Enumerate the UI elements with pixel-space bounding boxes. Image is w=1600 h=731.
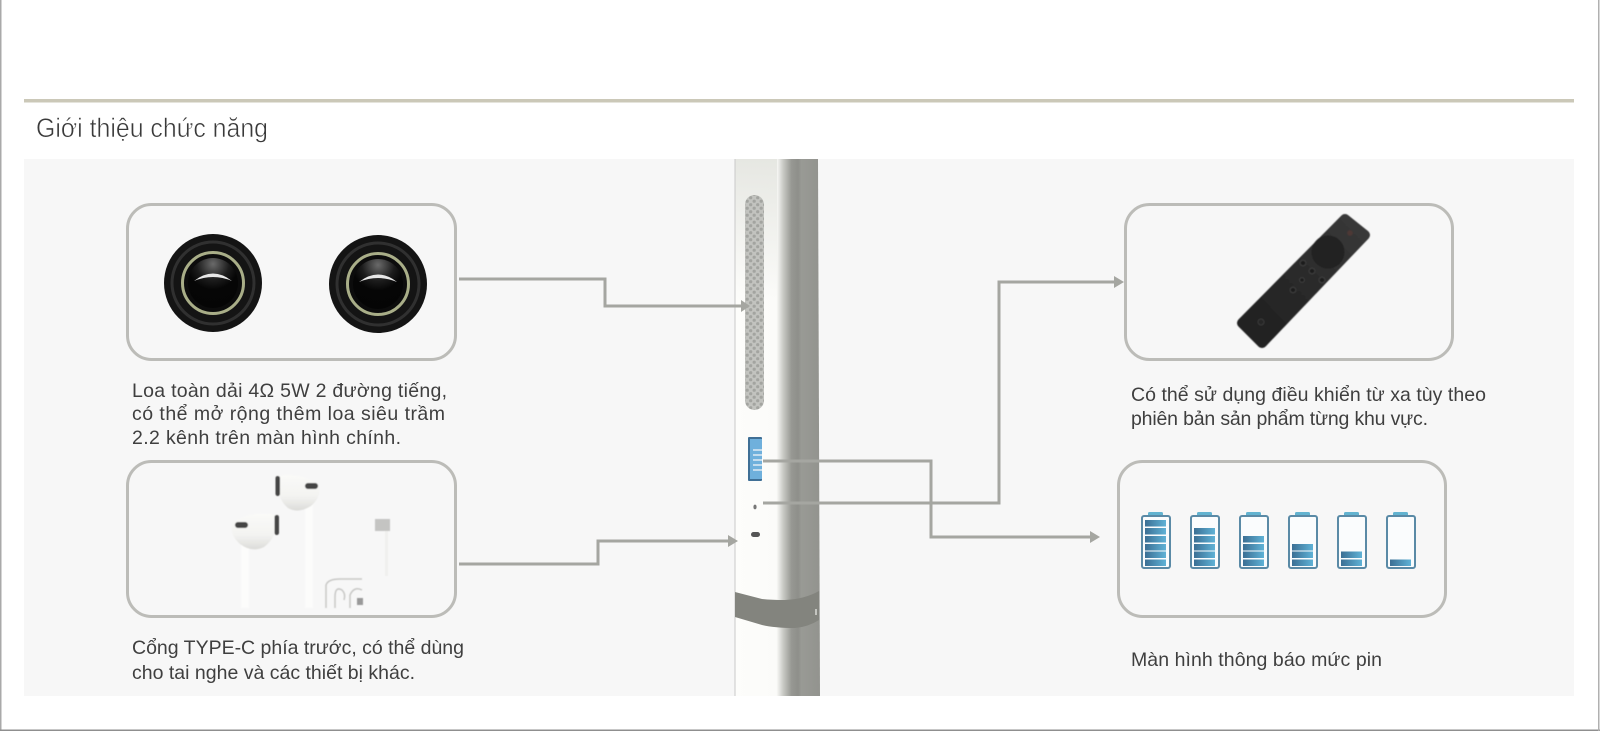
speaker description: có thể mở rộng thêm loa siêu trầm	[132, 403, 445, 425]
arrow: speakers to grille	[459, 279, 750, 312]
arrow: indicator to remote panel	[763, 276, 1124, 503]
icon: left speaker	[164, 234, 262, 332]
panel: speakers	[128, 204, 456, 360]
remote description: phiên bản sản phẩm từng khu vực.	[1131, 408, 1428, 430]
indicator hole	[753, 505, 757, 509]
grey band	[735, 591, 819, 628]
product pole	[734, 159, 820, 696]
speaker grille	[745, 195, 764, 410]
icon: right speaker	[329, 235, 427, 333]
speaker description: 2.2 kênh trên màn hình chính.	[132, 427, 401, 449]
earphone description: Cổng TYPE-C phía trước, có thể dùng	[132, 637, 464, 659]
arrow: earphones to Type-C port	[459, 535, 738, 564]
speaker description: Loa toàn dải 4Ω 5W 2 đường tiếng,	[132, 380, 447, 402]
USB port	[748, 437, 762, 481]
arrow: USB port to battery panel	[763, 461, 1100, 543]
mini earphone picture	[326, 579, 362, 608]
Type-C port	[751, 532, 760, 537]
icon: battery 3 bars	[1289, 512, 1317, 568]
icon: battery 2 bars	[1338, 512, 1366, 568]
panel: earphones	[128, 462, 456, 616]
remote description	[1131, 384, 1486, 430]
icon: battery 6 bars	[1142, 512, 1170, 568]
icon: remote	[1242, 219, 1365, 343]
earphone description	[132, 637, 464, 684]
icon: battery 5 bars	[1191, 512, 1219, 568]
icon: battery 1 bar	[1387, 512, 1415, 568]
icon: battery 4 bars	[1240, 512, 1268, 568]
remote description: Có thể sử dụng điều khiển từ xa tùy theo	[1131, 384, 1486, 406]
panel: background	[24, 159, 1574, 696]
battery description: Màn hình thông báo mức pin	[1131, 649, 1382, 671]
panel: battery indicator	[1118, 462, 1446, 616]
title: Giới thiệu chức năng	[36, 113, 268, 143]
panel: remote control	[1126, 204, 1452, 360]
connector	[375, 519, 390, 531]
speaker description	[132, 380, 447, 449]
heading rule	[24, 99, 1574, 102]
icon: earphones	[232, 475, 390, 608]
earphone description: cho tai nghe và các thiết bị khác.	[132, 662, 415, 684]
